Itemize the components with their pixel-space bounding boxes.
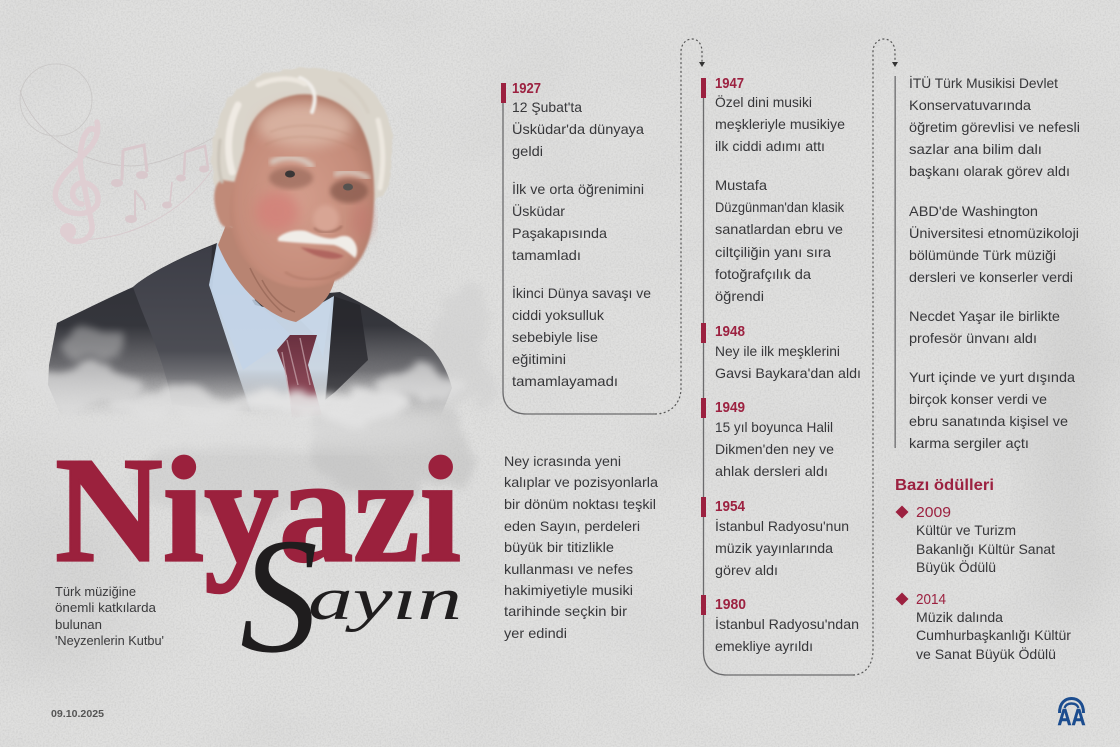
award 2009: Bakanlığı Kültür Sanat xyxy=(916,542,1055,557)
heading: awards: Bazı ödülleri xyxy=(895,477,994,494)
text: career in column 3: Konservatuvarında xyxy=(909,98,1031,113)
text: career in column 3: profesör ünvanı aldı xyxy=(909,331,1037,346)
text: summary paragraph: hakimiyetiyle musiki xyxy=(504,583,633,598)
text: 1927 entry: eğitimini xyxy=(512,352,566,367)
text: 1949 entry: 1949 xyxy=(715,400,745,416)
shirt collar xyxy=(212,243,293,370)
text: 1947 entry xyxy=(715,76,845,304)
text: 1927 entry: Üsküdar xyxy=(512,204,565,219)
title: Niyazi: Niyazi xyxy=(55,426,461,594)
text: 1927 entry xyxy=(512,81,651,389)
timeline line: column 3 xyxy=(894,76,896,448)
subtitle: 'Neyzenlerin Kutbu' xyxy=(55,634,164,648)
award 2009: Kültür ve Turizm xyxy=(916,523,1016,538)
face xyxy=(230,94,374,288)
text: career in column 3: Üniversitesi etnomüzikoloji xyxy=(909,226,1079,241)
text: career in column 3: öğretim görevlisi ve nefesli xyxy=(909,120,1080,135)
watercolour wash behind portrait and title xyxy=(130,280,495,515)
logo: AA agency mark: AA xyxy=(1058,704,1086,730)
text: career in column 3: bölümünde Türk müziği xyxy=(909,248,1056,263)
text: career in column 3 xyxy=(909,76,1080,451)
ear xyxy=(214,180,238,228)
text: 1947 entry: Mustafa xyxy=(715,178,767,193)
text: 1954 entry xyxy=(715,499,849,578)
text: 1927 entry: İkinci Dünya savaşı ve xyxy=(512,286,651,301)
award 2009 xyxy=(896,504,1055,575)
title: Sayın script: S xyxy=(240,504,318,687)
text: 1949 entry xyxy=(715,400,834,479)
subtitle: önemli katkılarda xyxy=(55,601,156,615)
text: 1948 entry: Gavsi Baykara'dan aldı xyxy=(715,366,861,381)
text: career in column 3: sazlar ana bilim dalı xyxy=(909,142,1042,157)
text: 1927 entry: 1927 xyxy=(512,81,541,97)
text: career in column 3: dersleri ve konserler verdi xyxy=(909,270,1073,285)
text: career in column 3: karma sergiler açtı xyxy=(909,436,1029,451)
text: summary paragraph: yer edindi xyxy=(504,626,567,641)
text: 1927 entry: geldi xyxy=(512,144,543,159)
icon: music notes and treble clef xyxy=(20,64,215,241)
text: 1954 entry: müzik yayınlarında xyxy=(715,541,833,556)
text: career in column 3: ABD'de Washington xyxy=(909,204,1038,219)
text: 1980 entry: emekliye ayrıldı xyxy=(715,639,813,654)
hair strands xyxy=(219,78,383,188)
eye sockets xyxy=(269,167,313,189)
award 2014: Cumhurbaşkanlığı Kültür xyxy=(916,628,1071,643)
text: 1947 entry: 1947 xyxy=(715,76,744,92)
text: 1954 entry: görev aldı xyxy=(715,563,778,578)
subtitle: bulunan xyxy=(55,618,102,632)
forehead wrinkles xyxy=(265,126,358,150)
hair xyxy=(212,68,393,200)
text: 1948 entry xyxy=(715,324,861,381)
text: 1980 entry: 1980 xyxy=(715,597,746,613)
text: career in column 3: Necdet Yaşar ile birlikte xyxy=(909,309,1060,324)
left lapel xyxy=(133,246,252,412)
text: 1927 entry: Üsküdar'da dünyaya xyxy=(512,122,644,137)
text: 1947 entry: sanatlardan ebru ve xyxy=(715,222,843,237)
timeline connector: column 2 xyxy=(701,39,898,675)
text: summary paragraph: kullanması ve nefes xyxy=(504,562,633,577)
text: 1927 entry: sebebiyle lise xyxy=(512,330,598,345)
text: 1947 entry: ilk ciddi adımı attı xyxy=(715,139,825,154)
title: Sayın script xyxy=(240,504,462,687)
icon: diamond bullet xyxy=(896,592,908,606)
text: summary paragraph: tarihinde seçkin bir xyxy=(504,604,628,619)
text: career in column 3: Yurt içinde ve yurt dışında xyxy=(909,370,1075,385)
text: 1947 entry: meşkleriyle musikiye xyxy=(715,117,845,132)
text: summary paragraph xyxy=(504,454,658,641)
subtitle xyxy=(55,585,164,648)
suit jacket xyxy=(48,243,452,418)
award 2014: 2014 xyxy=(916,591,946,608)
text: 1954 entry: İstanbul Radyosu'nun xyxy=(715,519,849,534)
text: 1927 entry: ciddi yoksulluk xyxy=(512,308,604,323)
eyes xyxy=(285,170,295,178)
forehead highlight xyxy=(257,103,353,147)
award 2009: Büyük Ödülü xyxy=(916,560,996,575)
text: 1947 entry: öğrendi xyxy=(715,289,764,304)
neck xyxy=(218,225,336,322)
moustache xyxy=(278,230,357,258)
text: 1927 entry: 12 Şubat'ta xyxy=(512,100,582,115)
icon: diamond bullet xyxy=(896,506,908,518)
text: 1980 entry xyxy=(715,597,859,654)
nose xyxy=(313,205,339,233)
text: 1927 entry: tamamlayamadı xyxy=(512,374,618,389)
text: 1949 entry: 15 yıl boyunca Halil xyxy=(715,420,833,435)
chin shading xyxy=(285,272,340,280)
mouth xyxy=(300,247,344,259)
timeline connector: column 1 xyxy=(501,39,705,414)
text: career in column 3: başkanı olarak görev aldı xyxy=(909,164,1070,179)
award 2014: ve Sanat Büyük Ödülü xyxy=(916,647,1056,662)
text: 1948 entry: Ney ile ilk meşklerini xyxy=(715,344,840,359)
text: career in column 3: birçok konser verdi ve xyxy=(909,392,1047,407)
text: 1949 entry: ahlak dersleri aldı xyxy=(715,464,828,479)
award 2009: 2009 xyxy=(916,504,951,521)
text: 1947 entry: ciltçiliğin yanı sıra xyxy=(715,245,831,260)
text: 1927 entry: Paşakapısında xyxy=(512,226,607,241)
text: 1947 entry: fotoğrafçılık da xyxy=(715,267,811,282)
title: Sayın script: ayın xyxy=(308,566,462,632)
text: career in column 3: ebru sanatında kişisel ve xyxy=(909,414,1068,429)
cheeks xyxy=(255,192,299,232)
subtitle: Türk müziğine xyxy=(55,585,136,599)
text: summary paragraph: bir dönüm noktası teşkil xyxy=(504,497,656,512)
text: 1949 entry: Dikmen'den ney ve xyxy=(715,442,834,457)
text: summary paragraph: Ney icrasında yeni xyxy=(504,454,621,469)
text: 1947 entry: Düzgünman'dan klasik xyxy=(715,200,844,215)
eyebrows xyxy=(272,158,312,166)
right jacket shadow xyxy=(325,296,368,400)
award 2014: Müzik dalında xyxy=(916,610,1003,625)
text: summary paragraph: kalıplar ve pozisyonlarla xyxy=(504,475,658,490)
award 2014 xyxy=(896,591,1071,662)
text: 1927 entry: tamamladı xyxy=(512,248,581,263)
text: 1947 entry: Özel dini musiki xyxy=(715,95,812,110)
text: 1954 entry: 1954 xyxy=(715,499,745,515)
text: 1948 entry: 1948 xyxy=(715,324,745,340)
text: summary paragraph: büyük bir titizlikle xyxy=(504,540,614,555)
necktie xyxy=(277,335,322,418)
text: 1927 entry: İlk ve orta öğrenimini xyxy=(512,182,644,197)
text: career in column 3: İTÜ Türk Musikisi Devlet xyxy=(909,76,1058,91)
portrait of Niyazi Sayın xyxy=(48,68,452,418)
shirt xyxy=(209,243,334,410)
text: summary paragraph: eden Sayın, perdeleri xyxy=(504,519,640,534)
mist over portrait base xyxy=(20,329,465,444)
text: 1980 entry: İstanbul Radyosu'ndan xyxy=(715,617,859,632)
date: 09.10.2025 xyxy=(51,708,104,720)
